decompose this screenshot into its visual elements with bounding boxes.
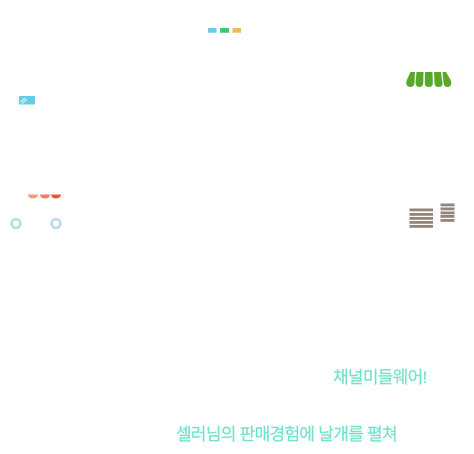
icon: cart wheels [12,219,60,228]
icon: green awning [406,72,451,87]
icon: blue card [19,96,35,104]
icon: cart awning scallops [28,194,61,198]
heading: seller experience: 셀러님의 판매경험에 날개를 펼쳐 [176,425,397,444]
icon: right brown stripes [440,204,454,222]
icon: three colored dots [208,28,241,33]
icon: left brown stripes [410,208,433,228]
heading: channel middleware: 채널미들웨어! [333,368,427,387]
